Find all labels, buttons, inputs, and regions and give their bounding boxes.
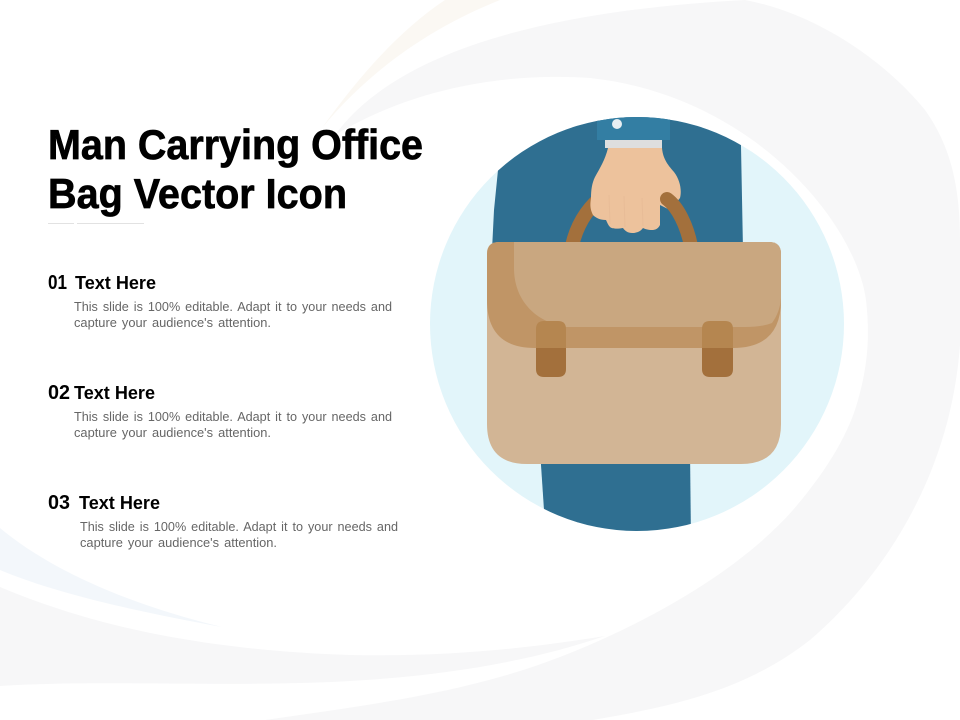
title: Man Carrying Office <box>48 121 423 168</box>
item 02: This slide is 100% editable. Adapt it to your needs and <box>74 409 392 424</box>
cuff button <box>612 119 622 129</box>
item 02: 02 <box>48 382 70 404</box>
bag body <box>487 242 781 464</box>
item 03: 03 <box>48 492 70 514</box>
item 01: Text Here <box>75 272 156 293</box>
item 03: capture your audience's attention. <box>80 535 277 550</box>
light blue circle <box>430 117 844 531</box>
item 01: 01 <box>48 272 67 294</box>
item 01: This slide is 100% editable. Adapt it to your needs and <box>74 299 392 314</box>
handle left <box>572 198 600 246</box>
sleeve and trouser <box>492 100 743 540</box>
left strap <box>536 321 566 377</box>
title underline <box>48 223 144 224</box>
shirt cuff <box>605 140 662 148</box>
item 01: capture your audience's attention. <box>74 315 271 330</box>
bag flap highlight <box>514 242 781 327</box>
handle right <box>667 199 691 246</box>
icon: man carrying office bag <box>430 100 844 540</box>
item 02: capture your audience's attention. <box>74 425 271 440</box>
item 03: Text Here <box>79 492 160 513</box>
title <box>48 121 423 217</box>
right strap <box>702 321 733 377</box>
item 01 <box>48 272 392 330</box>
hand <box>590 148 681 233</box>
item 02 <box>48 382 392 440</box>
bag flap <box>487 242 781 348</box>
title: Bag Vector Icon <box>48 170 347 217</box>
item 03 <box>48 492 398 550</box>
item 03: This slide is 100% editable. Adapt it to your needs and <box>80 519 398 534</box>
item 02: Text Here <box>74 382 155 403</box>
